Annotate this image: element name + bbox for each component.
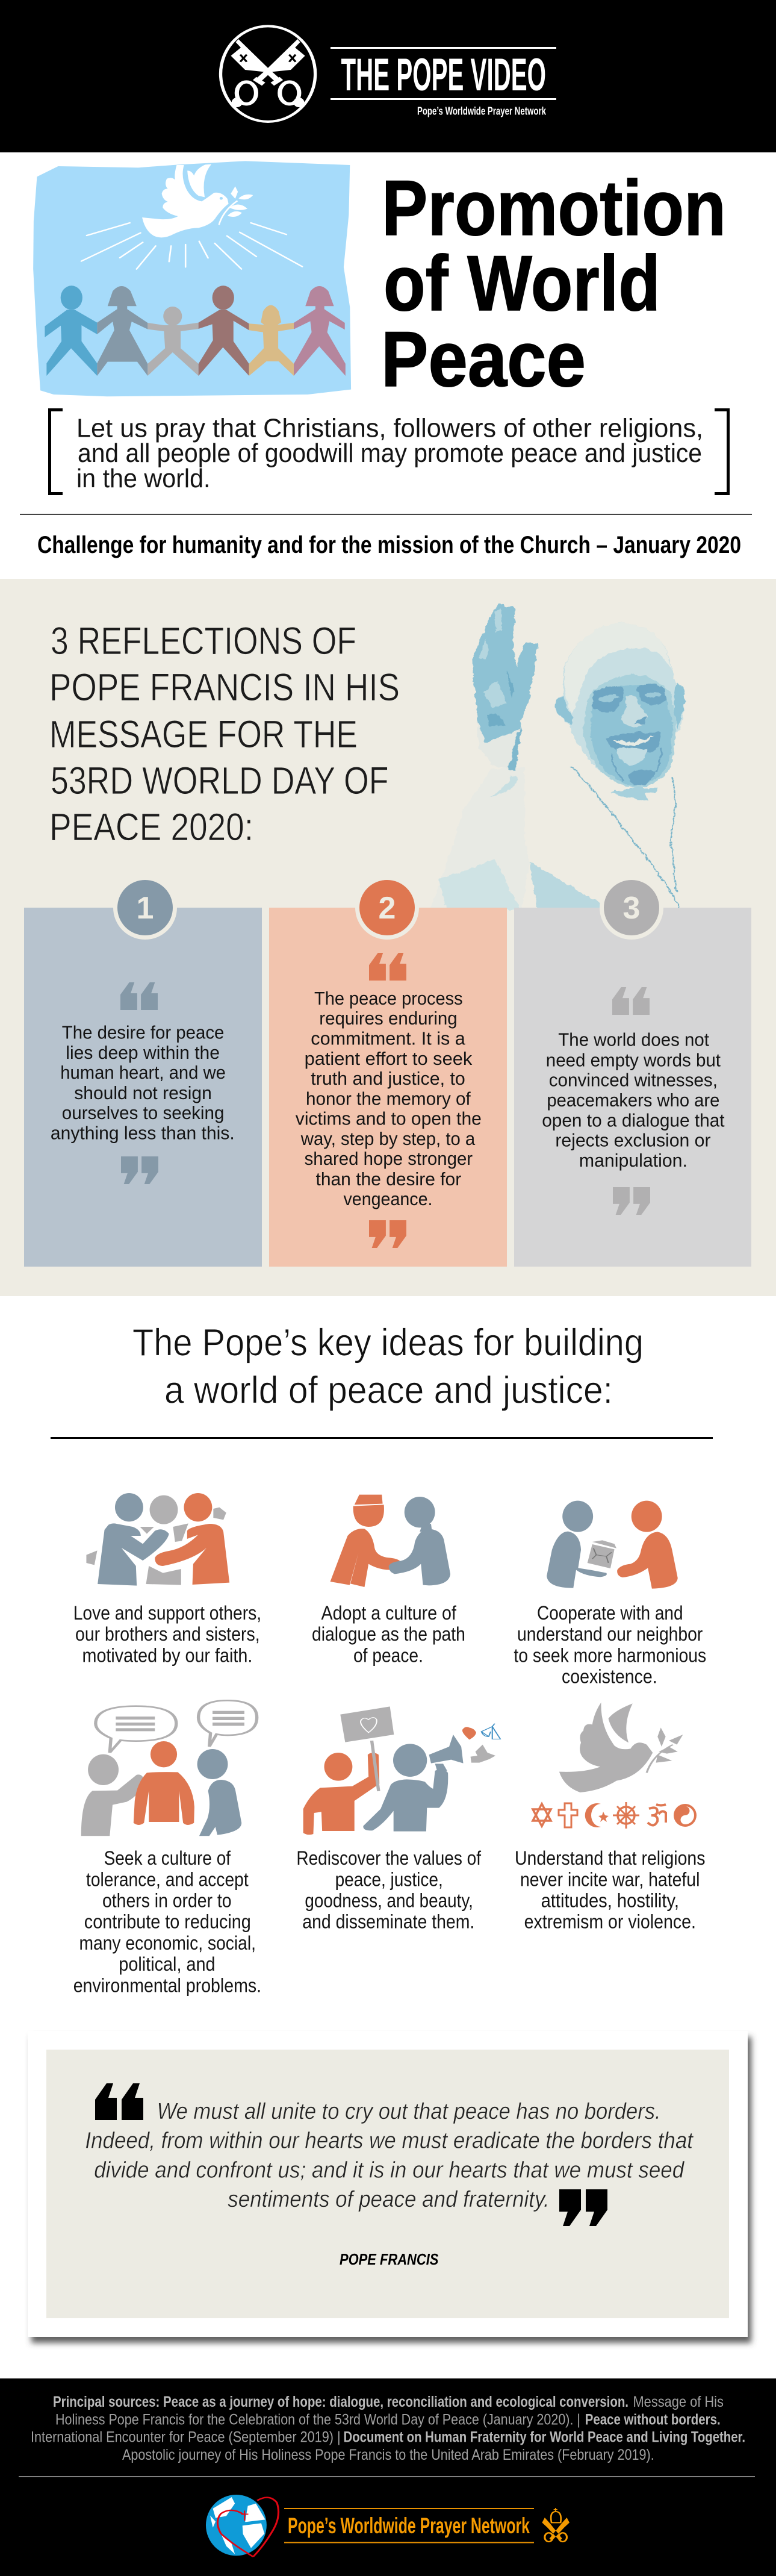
reflections heading: 53RD WORLD DAY OF (51, 759, 389, 802)
icon: crossed keys logo (221, 26, 315, 122)
icon: two people shaking hands (331, 1495, 450, 1587)
icon: sign and megaphone (303, 1706, 500, 1835)
text: idea 4: environmental problems. (73, 1974, 261, 1996)
prayer intention in brackets: in the world. (76, 464, 211, 493)
text: idea 2: of peace. (353, 1644, 423, 1666)
callout: Pope Francis quote (28, 2031, 748, 2337)
panel: reflections section (0, 579, 776, 1296)
card 1: should not resign (74, 1082, 212, 1103)
text: idea 5 (296, 1847, 481, 1933)
card 1: human heart, and we (60, 1062, 226, 1083)
prayer intention in brackets: Let us pray that Christians, followers of other religions, (76, 413, 703, 443)
card 3 (514, 876, 751, 1267)
text: idea 4: many economic, social, (79, 1932, 256, 1954)
reflections heading: MESSAGE FOR THE (49, 713, 358, 756)
hand (472, 604, 539, 743)
card 2: patient effort to seek (305, 1048, 473, 1069)
icon: neighbors exchanging a book (547, 1501, 678, 1589)
icon: globe and heart (206, 2495, 279, 2557)
header band (0, 0, 776, 152)
icon: religious symbols (533, 1802, 697, 1829)
text: idea 3: understand our neighbor (517, 1623, 703, 1645)
key ideas heading (132, 1321, 644, 1412)
logo tagline: Pope’s Worldwide Prayer Network (417, 105, 547, 117)
card 2: requires enduring (319, 1008, 458, 1029)
text: idea 6: attitudes, hostility, (541, 1890, 679, 1912)
card 2: truth and justice, to (311, 1068, 465, 1089)
card 2: than the desire for (315, 1168, 461, 1190)
icon: gray dove (559, 1703, 683, 1792)
sources text: Apostolic journey of His Holiness Pope Francis to the United Arab Emirates (February 2019). (122, 2447, 654, 2463)
card 2 (269, 876, 507, 1267)
icon: dove and religious symbols (533, 1703, 697, 1829)
text: idea 1: Love and support others, (73, 1602, 261, 1624)
callout: Pope Francis quote: POPE FRANCIS (340, 2250, 439, 2268)
key ideas heading: The Pope’s key ideas for building (132, 1321, 644, 1364)
card 3: manipulation. (579, 1150, 688, 1171)
text: idea 4: tolerance, and accept (86, 1868, 249, 1890)
network rules (284, 2509, 534, 2543)
title (381, 164, 726, 403)
text: idea 5: peace, justice, (335, 1868, 443, 1890)
text: idea 4: contribute to reducing (84, 1911, 251, 1933)
text: idea 4: others in order to (102, 1890, 232, 1912)
icon: group embracing (86, 1493, 229, 1586)
prayer intention in brackets (49, 410, 728, 494)
card 3: convinced witnesses, (549, 1069, 718, 1090)
footer (0, 2378, 776, 2576)
text: idea 2: dialogue as the path (312, 1623, 465, 1645)
text: idea 5: and disseminate them. (302, 1911, 474, 1933)
card 1: ourselves to seeking (62, 1102, 224, 1123)
title: Peace (381, 315, 586, 403)
logo rules (331, 48, 556, 99)
text: idea 4: Seek a culture of (104, 1847, 231, 1869)
text: idea 6: extremism or violence. (524, 1911, 696, 1933)
card 2: 2 (379, 891, 396, 926)
sources text: Holiness Pope Francis for the Celebration of the 53rd World Day of Peace (January 2020). | (55, 2411, 580, 2428)
title: Promotion (382, 164, 726, 252)
text: idea 1: our brothers and sisters, (75, 1623, 260, 1645)
text: idea 2 (312, 1602, 465, 1666)
reflections heading: 3 REFLECTIONS OF (51, 619, 356, 663)
text: idea 3: to seek more harmonious (514, 1644, 706, 1666)
logo wordmark: THE POPE VIDEO (341, 49, 546, 101)
text: idea 6: Understand that religions (515, 1847, 706, 1869)
sources text: Principal sources: Peace as a journey of hope: dialogue, reconciliation and ecological conversion. (53, 2394, 629, 2410)
card 2: shared hope stronger (305, 1148, 473, 1169)
rays of light (81, 223, 302, 269)
cuff (476, 721, 520, 771)
title: of World (383, 239, 660, 327)
head (554, 622, 684, 788)
card 1: lies deep within the (66, 1042, 220, 1063)
image: Pope Francis portrait (430, 604, 684, 909)
text: idea 4: political, and (119, 1953, 216, 1975)
text: idea 5: Rediscover the values of (296, 1847, 481, 1869)
key ideas heading: a world of peace and justice: (164, 1370, 613, 1412)
text: idea 3: coexistence. (562, 1666, 657, 1688)
card 1: The desire for peace (62, 1021, 224, 1043)
card 2: vengeance. (343, 1188, 432, 1209)
card 2: way, step by step, to a (300, 1128, 476, 1149)
network name: Pope’s Worldwide Prayer Network (288, 2513, 530, 2538)
card 2: commitment. It is a (311, 1028, 466, 1049)
card 3: rejects exclusion or (555, 1130, 710, 1150)
reflections heading: PEACE 2020: (49, 805, 253, 849)
card 3: The world does not (558, 1029, 709, 1050)
icon: dove (142, 164, 253, 237)
text: idea 1 (73, 1602, 261, 1666)
icon: tiara and keys (542, 2508, 570, 2542)
text: idea 5: goodness, and beauty, (305, 1890, 473, 1912)
callout: Pope Francis quote: sentiments of peace and fraternity. (228, 2187, 550, 2212)
text: idea 4 (73, 1847, 261, 1996)
text: idea 3: Cooperate with and (537, 1602, 683, 1624)
text: idea 6 (515, 1847, 706, 1933)
illustration: dove and paper people (33, 161, 351, 396)
card 3: open to a dialogue that (542, 1110, 725, 1131)
callout: Pope Francis quote: We must all unite to cry out that peace has no borders. (157, 2099, 661, 2124)
text: idea 6: never incite war, hateful (520, 1868, 700, 1890)
sources text: Peace without borders. (585, 2411, 721, 2428)
card 2: honor the memory of (306, 1088, 471, 1109)
paper people chain (45, 285, 346, 376)
text: idea 3 (514, 1602, 706, 1688)
icon: three people with speech bubbles (81, 1700, 257, 1836)
text: idea 1: motivated by our faith. (82, 1644, 252, 1666)
card 1: anything less than this. (51, 1122, 235, 1143)
sources text: International Encounter for Peace (September 2019) | (31, 2429, 341, 2446)
card 1: 1 (137, 891, 154, 926)
collar and chain (610, 788, 658, 801)
sources text: Message of His (633, 2394, 724, 2410)
card 3: peacemakers who are (547, 1090, 719, 1111)
reflections heading (49, 619, 400, 849)
card 3: need empty words but (546, 1049, 721, 1070)
reflections heading: POPE FRANCIS IN HIS (49, 666, 400, 709)
card 2: The peace process (314, 988, 463, 1009)
card 1 (24, 876, 262, 1267)
text: idea 2: Adopt a culture of (321, 1602, 456, 1624)
prayer intention in brackets: and all people of goodwill may promote peace and justice (78, 438, 702, 468)
card 3: 3 (623, 891, 640, 926)
callout: Pope Francis quote: divide and confront us; and it is in our hearts that we must seed (94, 2157, 685, 2183)
callout: Pope Francis quote: Indeed, from within our hearts we must eradicate the borders that (85, 2128, 694, 2154)
sources text (31, 2394, 745, 2463)
card 2: victims and to open the (296, 1108, 482, 1129)
